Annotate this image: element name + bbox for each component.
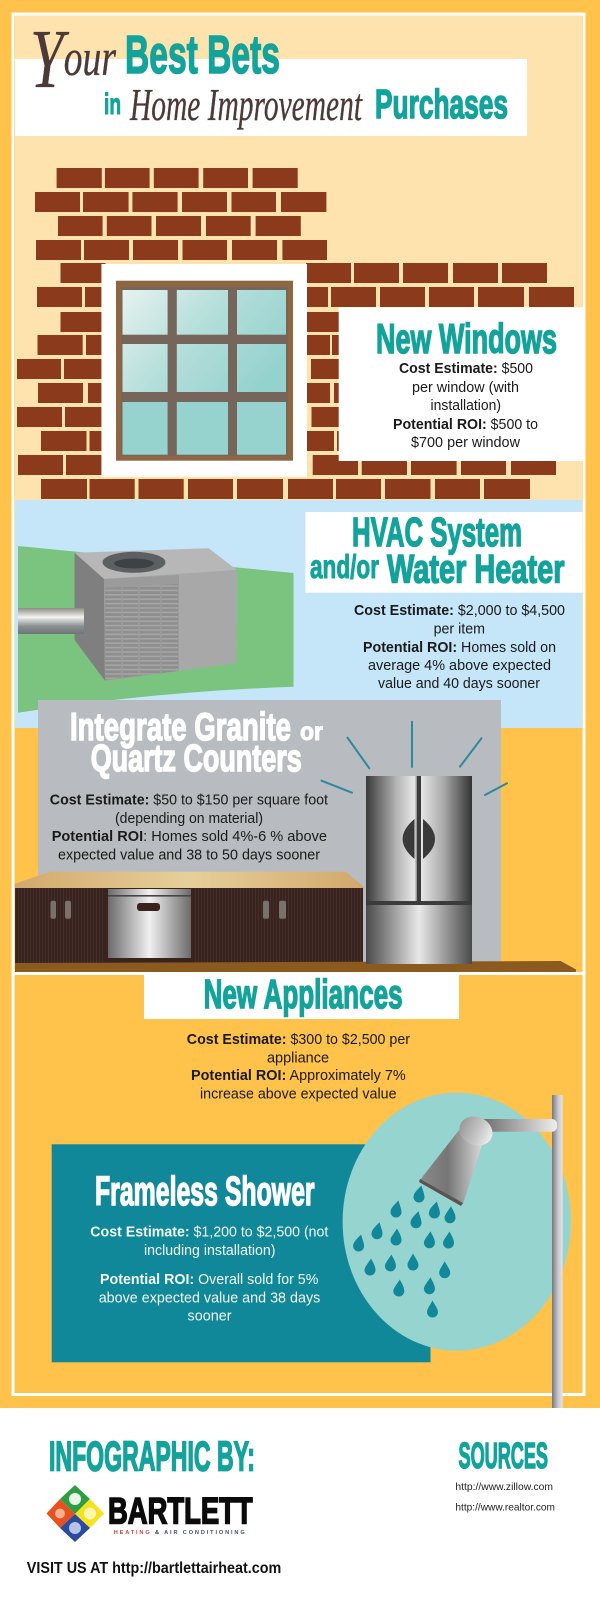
text: shower details: Potential ROI: Overall sold for 5% bbox=[100, 1271, 318, 1288]
text: counters details bbox=[50, 792, 329, 864]
text: windows details: Potential ROI: $500 to bbox=[393, 416, 538, 433]
panel: windows background bbox=[15, 14, 582, 500]
icon: window bbox=[101, 264, 307, 477]
shine rays bbox=[322, 722, 507, 795]
text: shower details: above expected value and 38 days bbox=[99, 1289, 320, 1306]
text: windows details: per window (with bbox=[412, 379, 519, 396]
text: sources list: http://www.zillow.com bbox=[455, 1481, 553, 1493]
icon: hvac unit bbox=[18, 548, 237, 681]
text: hvac details: Cost Estimate: $2,000 to $4,500 bbox=[354, 602, 565, 619]
title: Y bbox=[30, 13, 70, 106]
title: Purchases bbox=[375, 81, 508, 127]
text: visit us: VISIT US AT http://bartlettairheat.com bbox=[27, 1560, 281, 1577]
text: counters details: (depending on material) bbox=[115, 810, 263, 827]
text: hvac details bbox=[354, 602, 565, 692]
counter top bbox=[13, 872, 364, 888]
text: windows details bbox=[393, 360, 538, 451]
text: shower details: including installation) bbox=[144, 1242, 276, 1259]
heading: granite or quartz counters: Integrate Granite bbox=[70, 706, 291, 749]
panel: hvac heading bbox=[305, 509, 582, 593]
text: sources list bbox=[455, 1481, 555, 1514]
text: windows details: Cost Estimate: $500 bbox=[399, 360, 533, 377]
title: in bbox=[104, 88, 121, 121]
heading: granite or quartz counters: Quartz Counters bbox=[91, 738, 302, 780]
logo: bartlett: HEATING & AIR CONDITIONING bbox=[114, 1530, 245, 1536]
text: windows details: installation) bbox=[430, 397, 501, 414]
panel: counters background bbox=[38, 700, 501, 964]
icon: shower head bbox=[419, 1095, 563, 1408]
icon: refrigerator bbox=[366, 776, 472, 964]
heading: new appliances bbox=[144, 971, 459, 1019]
logo: bartlett bbox=[46, 1485, 253, 1542]
text: shower details: Cost Estimate: $1,200 to $2,500 (not bbox=[90, 1224, 329, 1241]
cabinet: right bbox=[192, 888, 363, 963]
icon: water drops bbox=[353, 1186, 456, 1318]
text: appliances details: Cost Estimate: $300 to $2,500 per bbox=[187, 1031, 410, 1048]
text: hvac details: value and 40 days sooner bbox=[378, 675, 540, 692]
heading: granite or quartz counters: or bbox=[300, 718, 323, 746]
divider line bbox=[13, 972, 584, 975]
text: shower details bbox=[90, 1224, 329, 1325]
text: counters details: Cost Estimate: $50 to $150 per square foot bbox=[50, 792, 329, 808]
dark strip under dishwasher bbox=[105, 888, 193, 963]
text: shower details: sooner bbox=[188, 1308, 232, 1325]
title: Best Bets bbox=[125, 25, 280, 85]
text: counters details: Potential ROI: Homes sold 4%-6 % above bbox=[52, 828, 327, 845]
text: hvac details: per item bbox=[434, 620, 485, 638]
panel: new windows bbox=[339, 307, 585, 461]
text: appliances details: appliance bbox=[267, 1050, 329, 1066]
heading: frameless shower: Frameless Shower bbox=[95, 1168, 315, 1214]
text: appliances details bbox=[187, 1031, 410, 1103]
heading: new appliances: New Appliances bbox=[204, 971, 403, 1017]
floor bbox=[15, 961, 576, 972]
text: windows details: $700 per window bbox=[411, 434, 520, 451]
text: hvac details: average 4% above expected bbox=[368, 657, 551, 674]
text: hvac details: Potential ROI: Homes sold on bbox=[363, 639, 556, 656]
title: our bbox=[64, 30, 117, 87]
panel: hvac background bbox=[15, 500, 582, 728]
text: appliances details: Potential ROI: Approximately 7% bbox=[191, 1067, 406, 1084]
lawn bbox=[18, 546, 294, 713]
pipe bbox=[18, 608, 84, 634]
footer: infographic by: INFOGRAPHIC BY: bbox=[49, 1433, 255, 1480]
title bbox=[15, 13, 527, 136]
shower circle bbox=[343, 1093, 571, 1351]
icon: dishwasher bbox=[108, 889, 191, 958]
logo: bartlett: BARTLETT bbox=[108, 1490, 253, 1532]
text: appliances details: increase above expected value bbox=[200, 1086, 396, 1103]
text: counters details: expected value and 38 to 50 days sooner bbox=[58, 846, 320, 864]
title: Home Improvement bbox=[129, 79, 363, 130]
panel: hvac heading: and/or bbox=[310, 548, 379, 585]
brick wall bbox=[17, 168, 574, 499]
text: sources list: http://www.realtor.com bbox=[455, 1502, 555, 1514]
cabinet: left bbox=[15, 888, 105, 963]
panel: frameless shower bbox=[52, 1144, 430, 1362]
heading: granite or quartz counters bbox=[70, 706, 323, 780]
